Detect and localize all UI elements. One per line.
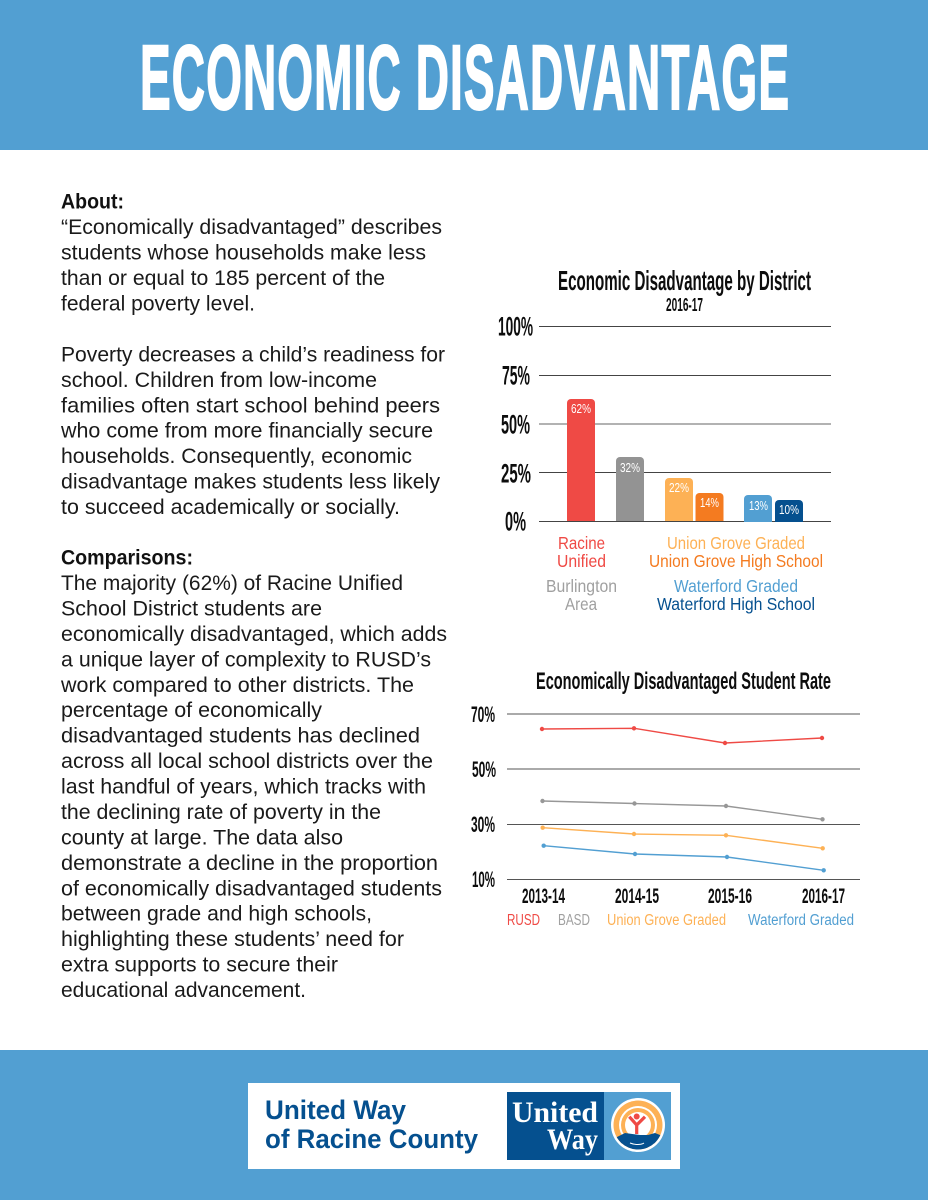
header banner [0,0,928,150]
text block: comparisons: work compared to other districts. The [60,674,414,697]
line: RUSD [540,726,824,745]
y axis labels: 50% [472,757,496,782]
icon: United Way logo: United [512,1096,598,1129]
text block: poverty: disadvantage makes students less likely [61,471,441,494]
line: BASD [540,799,825,822]
y axis labels [498,312,533,536]
category labels: Waterford Graded [674,576,798,596]
icon: United Way logo [507,1092,671,1160]
text block: comparisons: educational advancement. [61,979,306,1002]
y axis labels [471,702,496,892]
y axis labels: 10% [472,867,495,892]
text block: comparisons: of economically disadvantaged students [61,877,442,900]
y axis labels: 70% [471,702,495,727]
text block: poverty: to succeed academically or socially. [61,496,400,519]
category labels: Area [565,594,597,614]
x axis labels [522,885,845,908]
text block: poverty: who come from more financially secure [60,420,433,443]
category labels: Union Grove Graded [667,533,805,553]
line: Union Grove Graded [540,826,825,850]
bar: Waterford High School 10%: 10% [779,503,799,517]
text block: comparisons: a unique layer of complexity to RUSD’s [61,648,431,671]
text block: comparisons: extra supports to secure their [61,954,338,977]
text block: comparisons: across all local school districts over the [61,750,433,773]
bar: Waterford Graded 13% [744,495,772,522]
bar: Union Grove Graded 22% [665,478,693,521]
text block: comparisons: demonstrate a decline in the proportion [61,852,438,875]
text block: poverty [60,343,445,519]
text block: poverty: Poverty decreases a child’s readiness for [61,343,445,366]
text block: comparisons: last handful of years, which tracks with [61,776,426,798]
legend [507,912,854,929]
panel: body text [60,190,447,1002]
y axis labels: 30% [471,812,495,837]
legend: RUSD [507,912,540,929]
text block: comparisons: disadvantaged students has declined [61,725,420,748]
title: ECONOMIC DISADVANTAGE [140,27,789,129]
category labels: Unified [557,551,606,571]
text block: about: students whose households make less [61,241,426,264]
organisation name [265,1095,478,1154]
text block: comparisons [60,547,447,1002]
x axis labels: 2013-14 [522,885,565,908]
x axis labels: 2016-17 [802,885,845,908]
organisation name: of Racine County [265,1124,478,1154]
text block: comparisons: county at large. The data also [61,826,343,849]
text block: comparisons: School District students are [61,597,322,620]
category labels: Racine [558,533,605,553]
text block: comparisons: economically disadvantaged, which adds [61,623,447,646]
text block: about: than or equal to 185 percent of the [61,267,385,290]
bar: Waterford High School 10% [775,500,803,522]
legend: Union Grove Graded [607,912,726,929]
y axis labels: 100% [498,312,533,342]
bar: Burlington Area 32%: 32% [620,461,640,475]
text block: about: “Economically disadvantaged” describes [61,216,442,239]
category labels: Union Grove High School [649,551,823,571]
organisation name: United Way [265,1095,406,1125]
chart subtitle: 2016-17 [666,294,703,315]
text block: comparisons: between grade and high schools, [61,903,372,926]
text block: comparisons: percentage of economically [61,699,323,722]
text block: comparisons: Comparisons: [61,547,193,570]
bar: Racine Unified 62% [567,399,595,521]
bar: Waterford Graded 13%: 13% [749,499,768,513]
legend: BASD [558,912,590,929]
line chart: economically disadvantaged student rate [471,668,860,929]
x axis labels: 2015-16 [708,885,752,908]
text block: about [61,190,442,315]
y axis labels: 0% [505,506,526,536]
logo panel [248,1083,680,1169]
legend: Waterford Graded [748,912,854,929]
bar: Union Grove Graded 22%: 22% [669,481,689,495]
category labels: Waterford High School [657,594,815,614]
text block: comparisons: the declining rate of poverty in the [61,801,381,824]
bar chart: economic disadvantage by district [498,265,831,614]
icon: United Way logo: Way [547,1123,598,1156]
line: Waterford Graded [542,844,826,872]
footer banner [0,1050,928,1200]
text block: poverty: school. Children from low-income [61,369,377,392]
text block: poverty: families often start school behind peers [61,394,440,417]
category labels [546,533,823,614]
text block: about: About: [61,190,124,213]
x axis labels: 2014-15 [615,885,659,908]
text block: about: federal poverty level. [61,292,255,315]
y axis labels: 25% [501,458,531,488]
text block: comparisons: The majority (62%) of Racine Unified [61,572,403,595]
text block: poverty: households. Consequently, economic [61,445,412,468]
text block: comparisons: highlighting these students’ need for [61,928,404,951]
bar: Union Grove High School 14% [696,493,724,521]
bar: Burlington Area 32% [616,457,644,521]
category labels: Burlington [546,576,617,596]
y axis labels: 50% [501,410,530,440]
bar: Union Grove High School 14%: 14% [700,496,719,510]
bar: Racine Unified 62%: 62% [571,402,591,416]
y axis labels: 75% [502,360,530,390]
